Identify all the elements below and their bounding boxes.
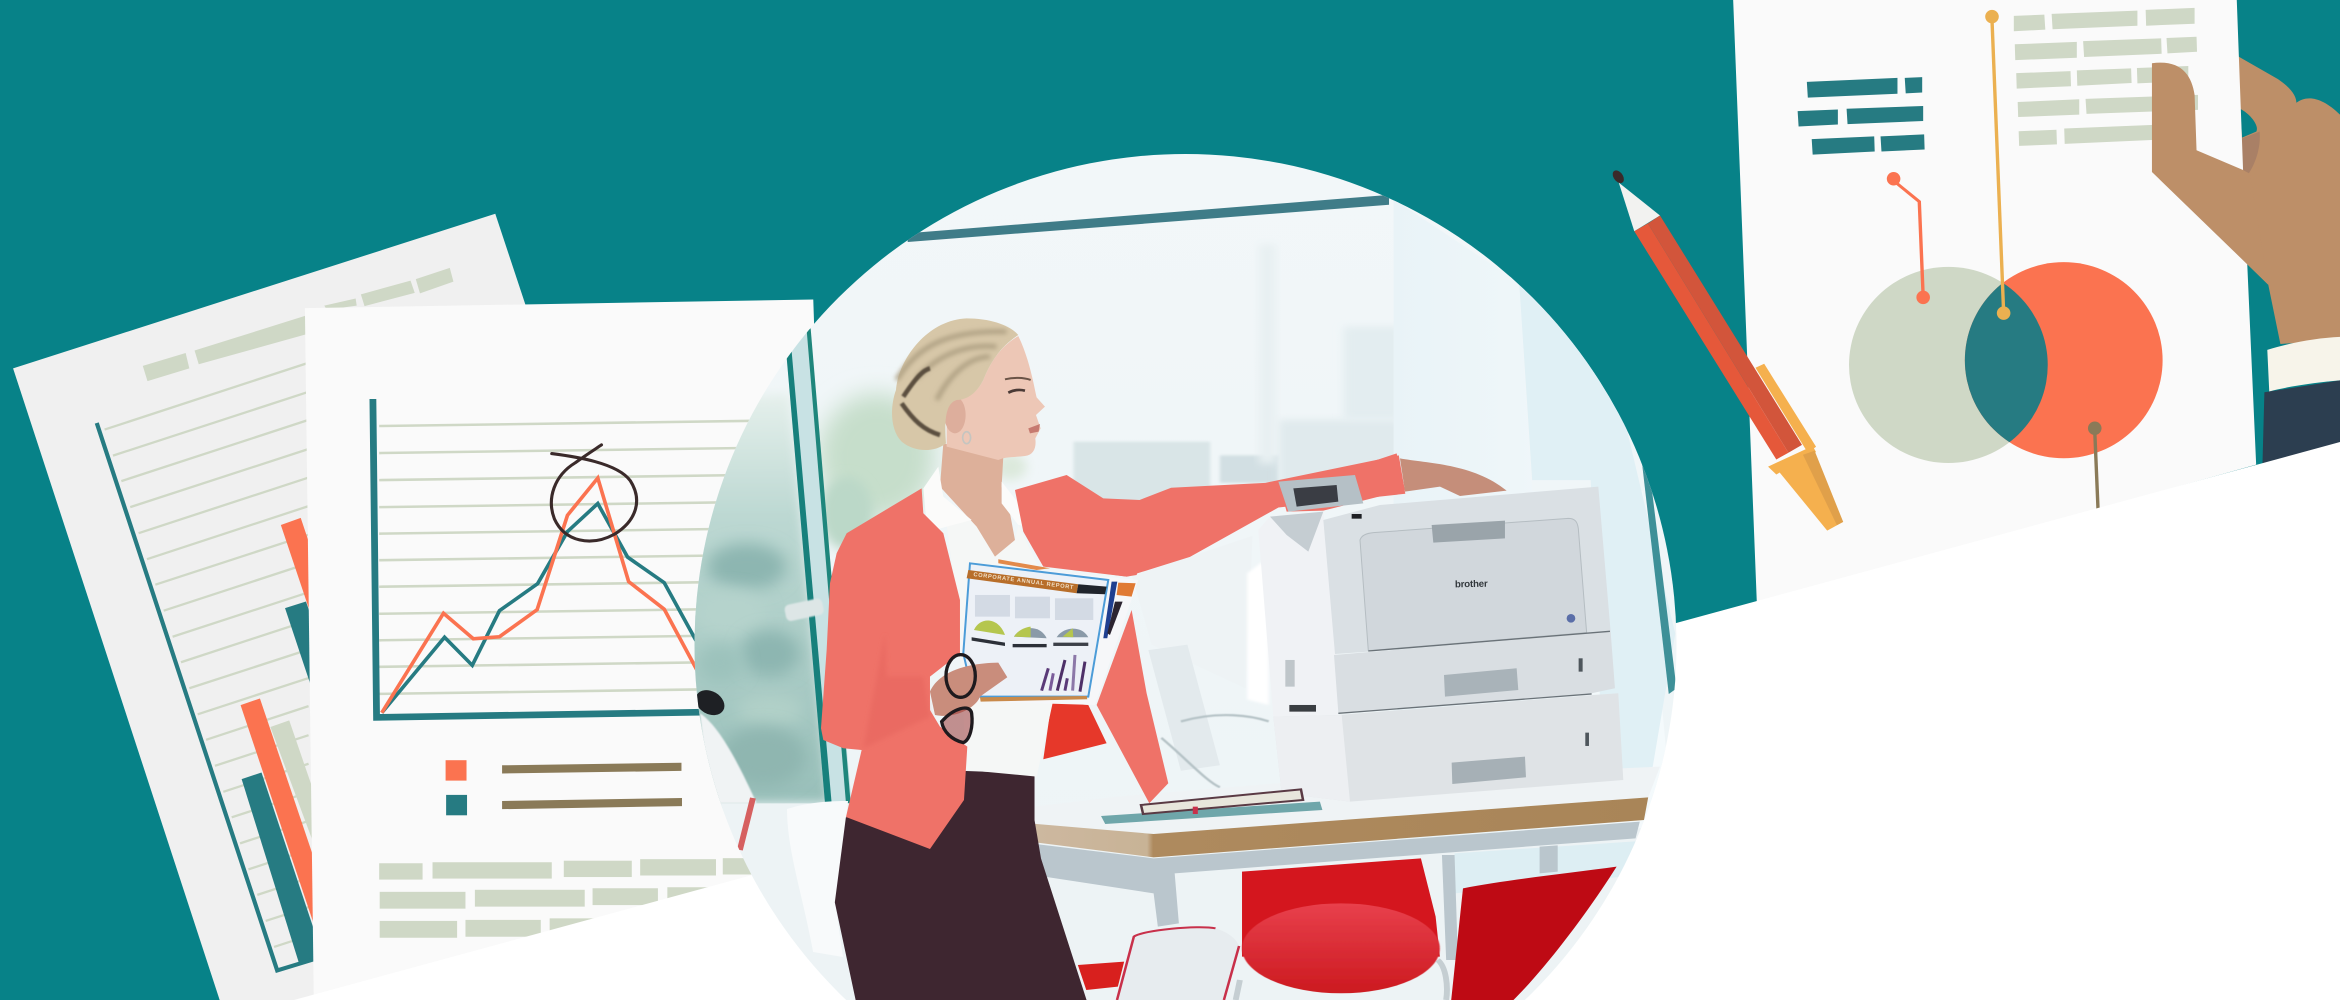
- furniture: [663, 767, 1660, 1000]
- jacket left panel: [821, 488, 967, 849]
- lips: [1028, 424, 1040, 433]
- trees and left window frame: [683, 328, 1027, 803]
- front page with line chart: [305, 299, 837, 1000]
- collar: [923, 467, 1022, 528]
- magazine title: CORPORATE ANNUAL REPORT: [973, 572, 1074, 591]
- white lower background: [294, 442, 2340, 1000]
- magazine: [960, 559, 1138, 705]
- floor and far window: [721, 803, 1636, 893]
- text placeholder bars: [379, 858, 759, 938]
- white chair left: [787, 801, 848, 957]
- hand fingers behind page: [2229, 51, 2340, 344]
- printer left side: [1258, 512, 1338, 717]
- panel: right document, pen and hand: [1610, 0, 2340, 605]
- shirt cuff: [2267, 337, 2340, 391]
- neck: [940, 443, 1015, 557]
- face: [947, 336, 1045, 460]
- jacket right panel: [1015, 475, 1157, 577]
- colour badge: [1567, 614, 1575, 623]
- sage text bars: [2014, 8, 2198, 146]
- window frame right: [1641, 458, 1677, 694]
- photo: woman using a printer: [663, 140, 1700, 1000]
- control panel: [1278, 475, 1363, 512]
- hand on printer: [1400, 458, 1507, 496]
- sleeve fold shadow: [863, 633, 930, 748]
- sleeve reaching to printer: [1096, 455, 1405, 577]
- sleeve cuff: [1278, 453, 1405, 512]
- tray one indicator: [1579, 658, 1583, 672]
- hand holding glasses: [930, 663, 1007, 716]
- finger shadow: [2242, 132, 2260, 173]
- woman lower body: [835, 455, 1405, 1000]
- office background: [694, 154, 1676, 874]
- table wood edge: [1029, 797, 1648, 857]
- jacket sleeve: [2262, 380, 2340, 465]
- teal text bars: [1798, 77, 1925, 155]
- window mullion: [784, 328, 852, 803]
- door handle: [1432, 521, 1505, 543]
- table legs: [1442, 845, 1558, 960]
- window frame top: [908, 195, 1389, 242]
- white chair front: [1117, 927, 1239, 1000]
- wall pillar: [1394, 200, 1520, 454]
- brand label: brother: [1455, 579, 1488, 590]
- printer seams: [1338, 631, 1610, 713]
- window background: [694, 154, 1676, 874]
- cables: [1161, 715, 1269, 787]
- tray one: [1334, 632, 1615, 713]
- background person: [697, 690, 757, 804]
- hand thumb over page: [2152, 63, 2268, 285]
- usb port: [1352, 514, 1362, 519]
- hair: [892, 318, 1018, 450]
- callout pin: brown: [2088, 421, 2102, 512]
- blouse: [983, 704, 1052, 776]
- icon: pen: [1610, 169, 1843, 531]
- red streak on background chair: [740, 798, 753, 850]
- printer: [1258, 453, 1623, 802]
- red chair right: [1451, 867, 1617, 1000]
- hand-drawn circle annotation: [551, 445, 637, 541]
- panel screen: [1293, 485, 1338, 507]
- earring: [963, 432, 971, 444]
- table top: [1219, 767, 1652, 788]
- callout pin: yellow: [1985, 10, 2010, 320]
- eye and brow: [1005, 378, 1031, 393]
- barcode label: [1285, 660, 1295, 687]
- trousers: [835, 771, 1087, 1000]
- table frame: [1030, 822, 1640, 927]
- notebooks: [1101, 789, 1322, 824]
- blurred foliage: [683, 393, 1027, 803]
- panel: left documents: [13, 214, 837, 1000]
- red seat behind woman: [1078, 962, 1124, 990]
- teal gap between fingers: [2240, 109, 2257, 138]
- chart legend: [446, 760, 682, 815]
- back page with bar chart: [13, 214, 575, 1000]
- glasses: [942, 655, 975, 743]
- monitor: [1148, 564, 1268, 770]
- red chair: [1236, 858, 1447, 1000]
- tray two: [1273, 693, 1623, 802]
- document page: [1733, 0, 2256, 605]
- venn diagram: [1849, 262, 2163, 463]
- woman upper body: [821, 318, 1168, 849]
- jacket lower front: [1097, 610, 1168, 803]
- ear: [946, 400, 966, 434]
- callout pin: orange: [1887, 172, 1930, 304]
- printer upper body: [1323, 487, 1611, 654]
- tray two indicator: [1585, 733, 1589, 746]
- printer door: [1360, 518, 1587, 651]
- red chair behind woman: [1043, 702, 1107, 759]
